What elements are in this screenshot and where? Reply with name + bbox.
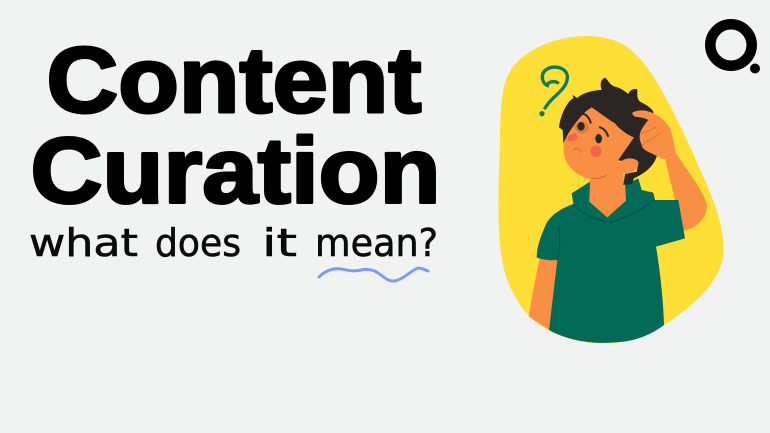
title [30, 28, 440, 222]
wavy underline [319, 268, 428, 281]
question mark [541, 67, 567, 115]
eyebrows [581, 114, 608, 136]
ear [621, 158, 638, 174]
hair front [559, 78, 655, 143]
raised arm [665, 152, 707, 231]
t-shirt with hood [537, 178, 685, 343]
illustration: confused boy [498, 36, 724, 343]
logo [710, 24, 760, 74]
hair back [618, 136, 657, 185]
subtitle: it [262, 221, 297, 265]
neck and face [564, 107, 637, 217]
subtitle: mean? [315, 221, 438, 265]
left arm [529, 257, 558, 330]
blush left [567, 133, 577, 141]
left eye [577, 122, 585, 131]
subtitle [29, 221, 438, 265]
eye bag [575, 121, 589, 133]
subtitle: does [155, 221, 241, 265]
hand [632, 110, 675, 159]
finger lines [642, 127, 660, 145]
yellow blob [498, 36, 724, 343]
mouth and neck line [573, 148, 606, 179]
right eye [595, 134, 602, 143]
blush cheek [590, 146, 602, 157]
subtitle: what [29, 221, 138, 265]
title: Content [46, 28, 422, 132]
shirt fold lines [557, 199, 654, 260]
title: Curation [30, 118, 440, 222]
